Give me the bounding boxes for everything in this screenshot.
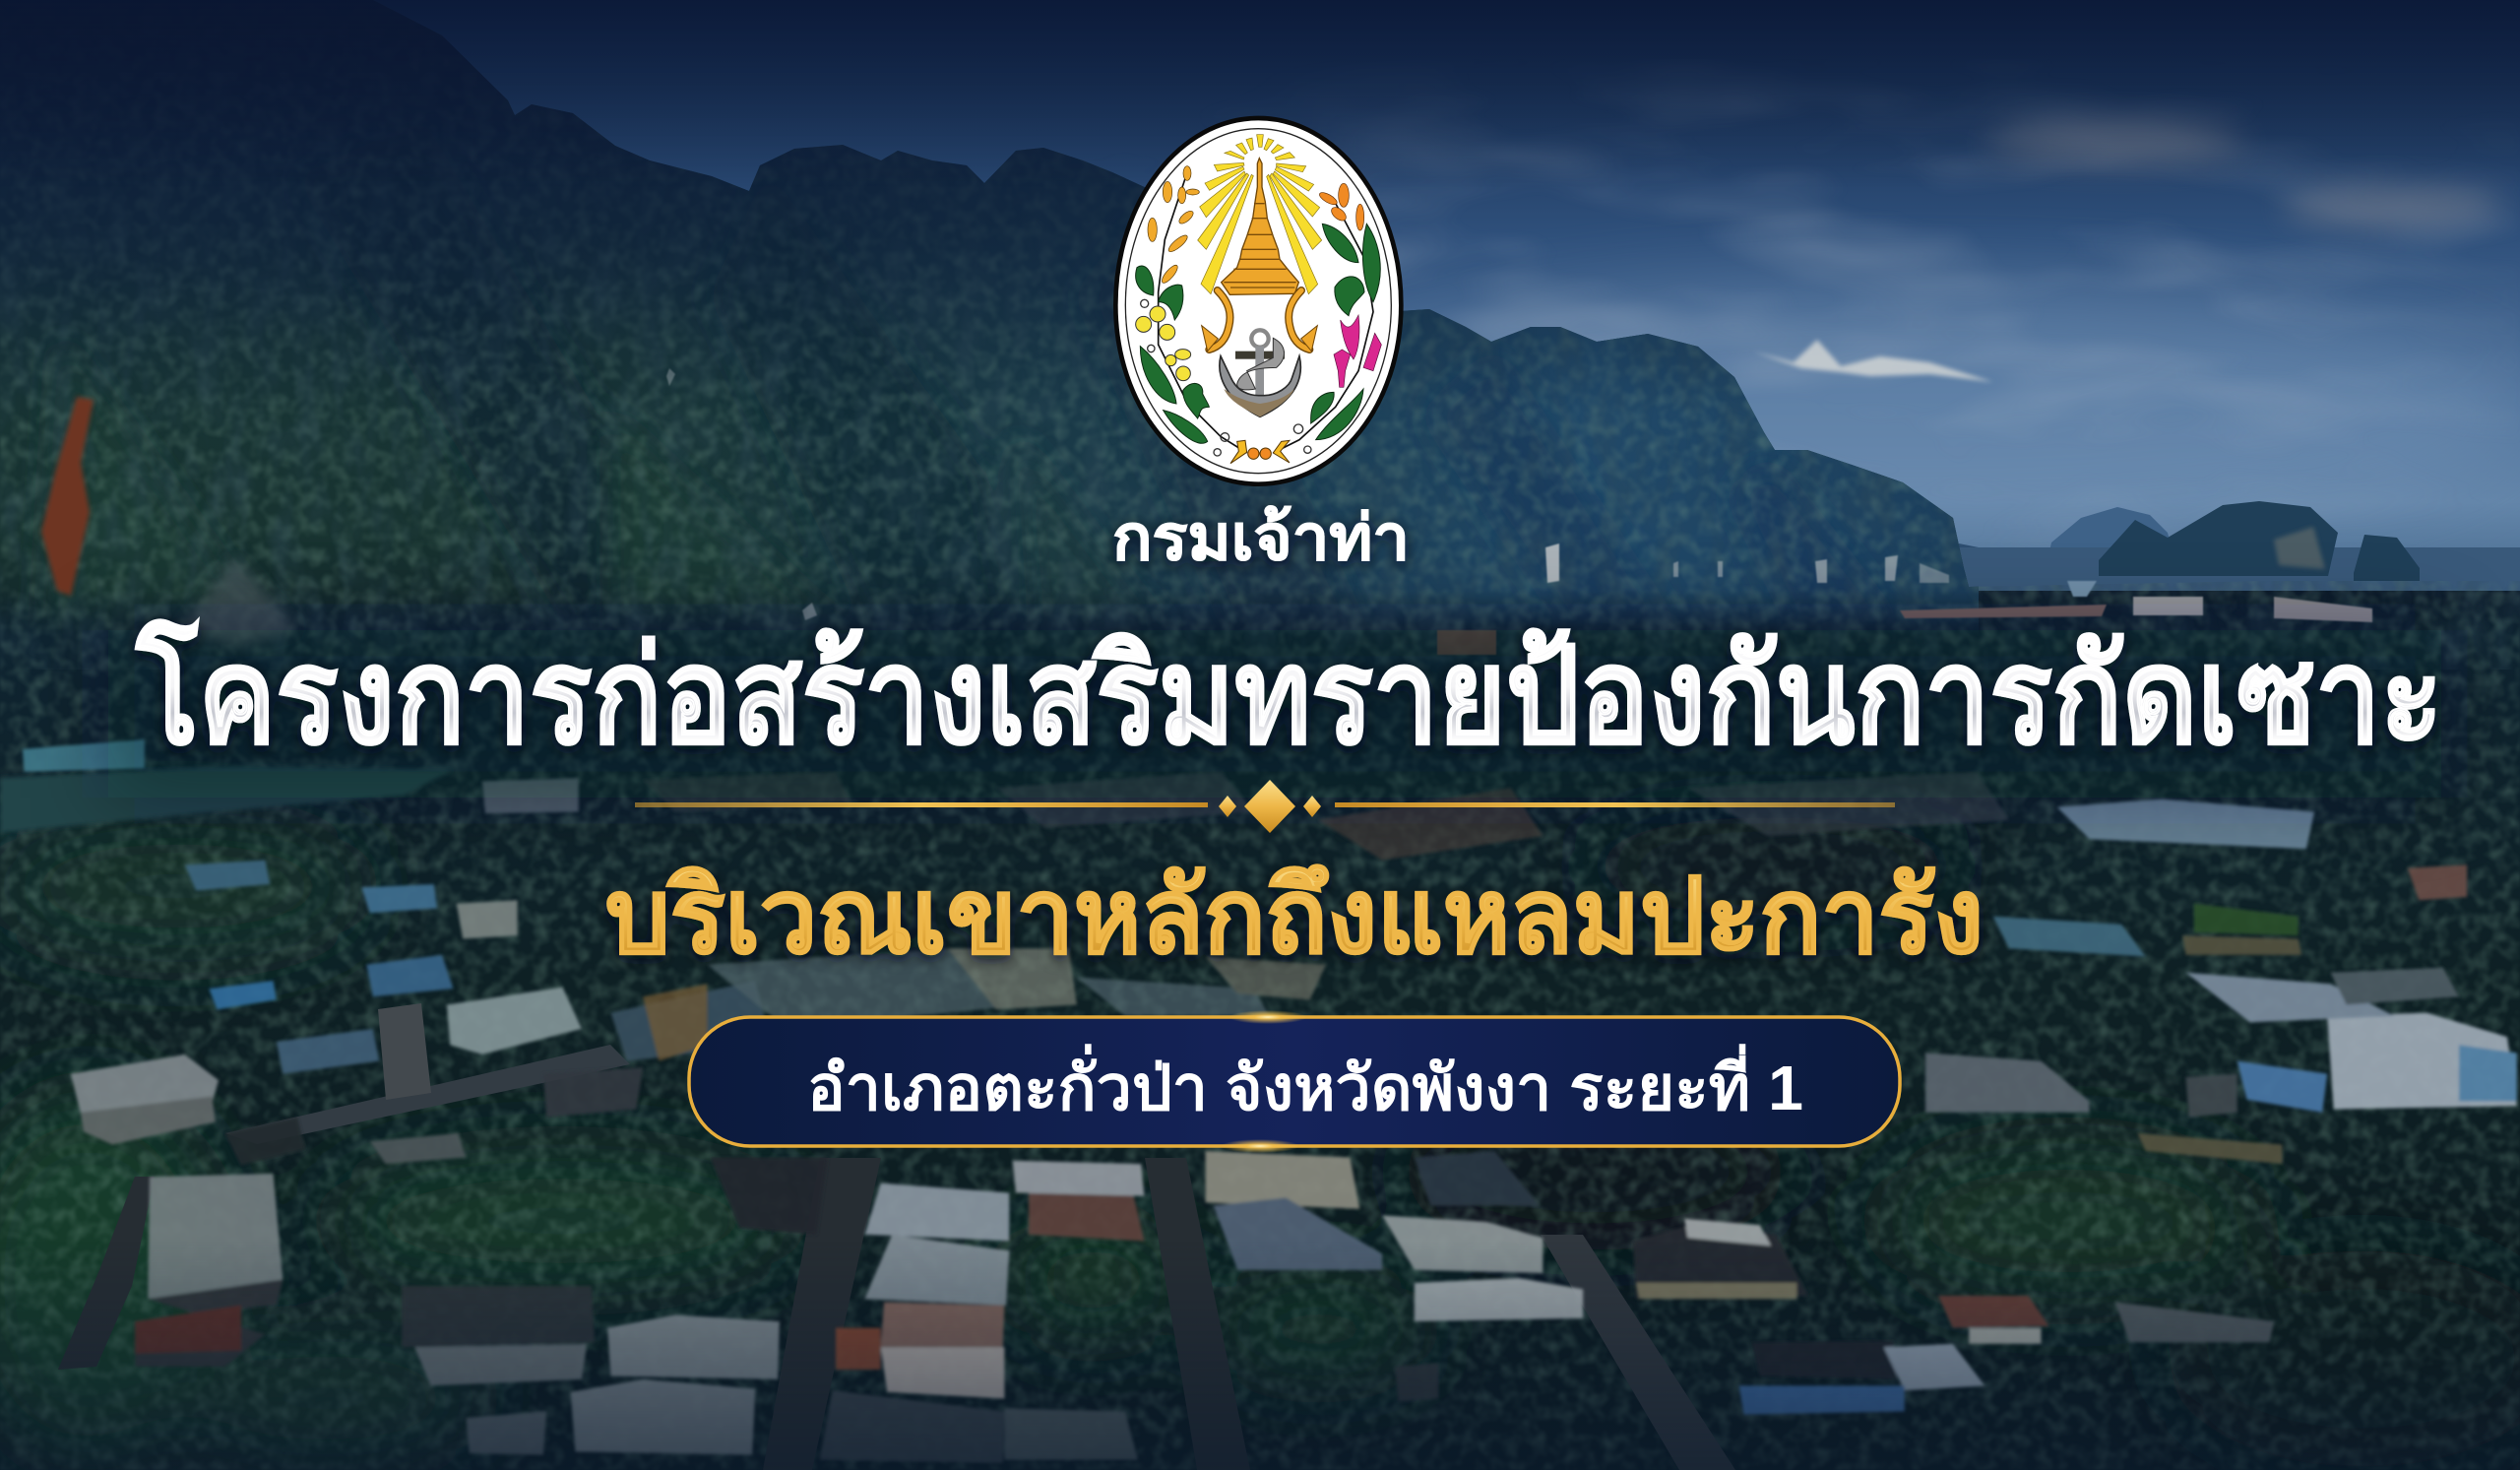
roads: [58, 1003, 1735, 1470]
location pill: [689, 1010, 1900, 1153]
pill bottom sparkle: [1221, 1139, 1299, 1153]
sky: [0, 0, 2520, 591]
landslide scar: [41, 397, 94, 596]
pale cliff faces: [666, 368, 1949, 620]
grey rock face: [179, 557, 297, 648]
naga finials: [1209, 290, 1309, 350]
ornament divider: [635, 780, 1895, 833]
bottom tie: [1230, 440, 1290, 464]
subtitle in gold: บริเวณเขาหลักถึงแหลมปะการัง: [605, 859, 1984, 975]
finial tips: [1202, 326, 1317, 352]
horizon buildings: [1437, 581, 2372, 655]
cloud texture: [1349, 89, 2498, 431]
shade behind title: [108, 630, 2441, 798]
building row: right: [1633, 799, 2517, 1415]
sky glow: [1309, 286, 2520, 542]
bright cloud: [1753, 340, 1993, 382]
seal oval: [1115, 118, 1401, 484]
building row: centre: [711, 1151, 1583, 1463]
river: [0, 766, 453, 833]
building row: left: [23, 739, 780, 1455]
forest patches: [0, 821, 2247, 1453]
mountain top darkening: [0, 0, 1709, 370]
anchor: [1220, 330, 1300, 416]
location text: อำเภอตะกั่วป่า จังหวัดพังงา ระยะที่ 1: [807, 1044, 1803, 1123]
tone overlay bottom: [0, 1241, 2520, 1470]
warm clouds: [1988, 121, 2500, 228]
emblem: Marine Department seal: [1115, 118, 1401, 484]
tone overlay top: [0, 0, 2520, 187]
ridge shadows: [69, 334, 1841, 605]
ground: [0, 598, 2520, 1365]
pill top sparkle: [1228, 1010, 1307, 1024]
left wreath: [1136, 166, 1247, 456]
department name: กรมเจ้าท่า: [1112, 502, 1410, 573]
inner ring: [1125, 129, 1391, 474]
right wreath: [1273, 183, 1381, 453]
town buildings: [23, 739, 2517, 1463]
sun rays: [1198, 135, 1322, 294]
distant hills: [1954, 501, 2520, 591]
spire: [1222, 159, 1298, 294]
building row: middle band behind title: [643, 772, 2009, 1061]
